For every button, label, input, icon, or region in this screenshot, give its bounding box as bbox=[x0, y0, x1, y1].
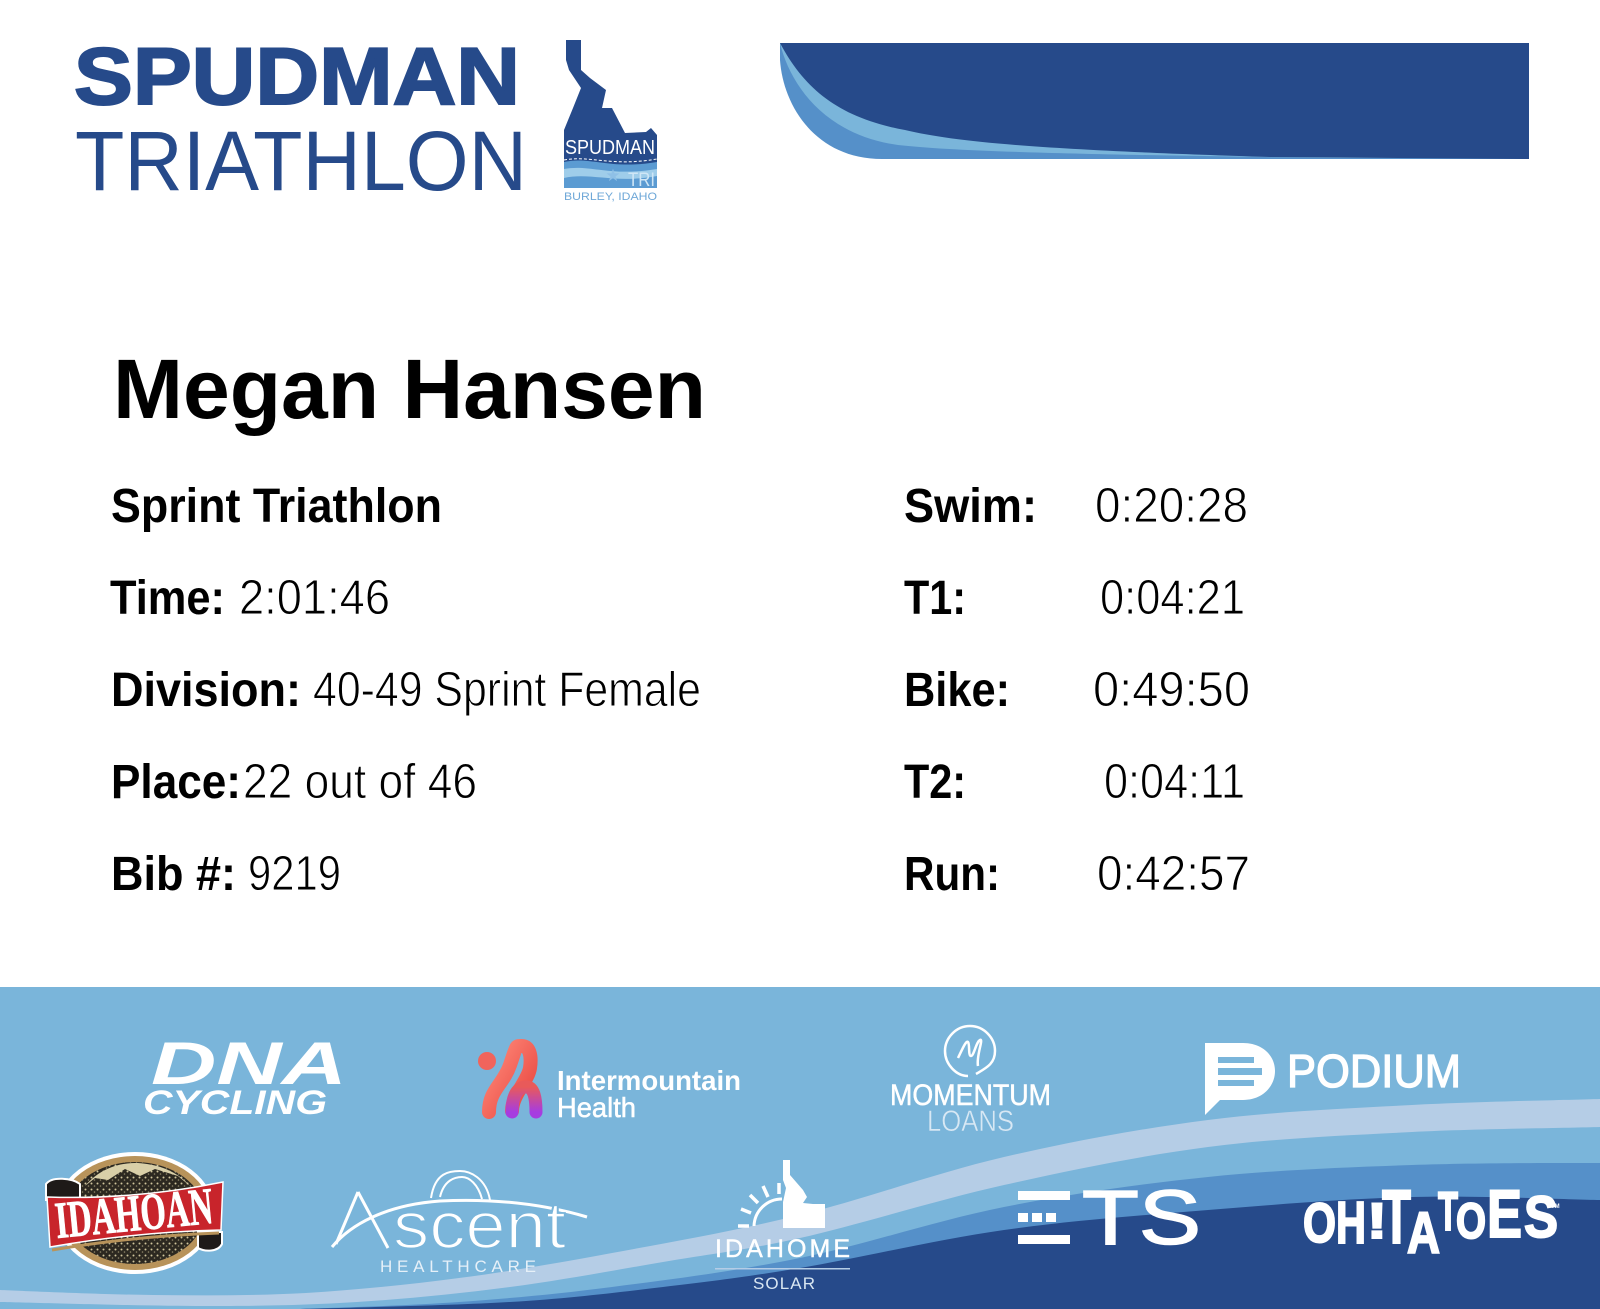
logo: Intermountain Health: Health bbox=[557, 1092, 636, 1123]
logo: Spudman Triathlon wordmark bbox=[74, 32, 527, 208]
logo: DNA Cycling: CYCLING bbox=[143, 1084, 327, 1122]
logo: Momentum Loans bbox=[890, 1026, 1051, 1138]
swim split bbox=[904, 479, 1248, 533]
T2 split: 0:04:11 bbox=[1104, 755, 1245, 809]
logo: Oh!tatoes: ! bbox=[1367, 1193, 1387, 1249]
run split bbox=[904, 847, 1250, 901]
logo: Oh!tatoes: E bbox=[1487, 1176, 1522, 1252]
bib number: Bib #: bbox=[111, 848, 236, 901]
logo: Momentum Loans: LOANS bbox=[927, 1105, 1014, 1138]
swim split: 0:20:28 bbox=[1095, 479, 1248, 533]
logo: ETS: TS bbox=[1082, 1175, 1201, 1261]
logo: Idahoan: IDAHOAN bbox=[53, 1178, 215, 1250]
logo: DNA Cycling: DNA bbox=[151, 1030, 347, 1097]
swim split: Swim: bbox=[904, 480, 1037, 533]
logo: Oh!tatoes: T bbox=[1438, 1180, 1458, 1242]
logo: ETS bbox=[1018, 1175, 1201, 1261]
bike split: Bike: bbox=[904, 664, 1010, 717]
bike split bbox=[904, 663, 1250, 717]
logo: Oh!tatoes: O bbox=[1303, 1191, 1336, 1254]
logo: Oh!tatoes: H bbox=[1336, 1190, 1366, 1256]
division: Division: bbox=[111, 664, 301, 717]
result details: left column bbox=[110, 480, 701, 901]
run split: 0:42:57 bbox=[1097, 847, 1250, 901]
T2 split: T2: bbox=[904, 756, 966, 809]
overall time bbox=[110, 571, 390, 625]
logo: Oh!tatoes: A bbox=[1407, 1201, 1440, 1266]
logo: Oh!tatoes: S bbox=[1524, 1185, 1558, 1250]
logo: Idaho state badge: SPUDMAN bbox=[565, 137, 655, 159]
logo: Oh!tatoes bbox=[1303, 1175, 1560, 1266]
logo: Podium bbox=[1205, 1043, 1461, 1115]
logo: Spudman Triathlon wordmark: SPUDMAN bbox=[74, 32, 520, 122]
logo: DNA Cycling bbox=[143, 1030, 347, 1122]
logo: Idaho state badge: ★ bbox=[605, 166, 621, 185]
logo: Momentum Loans: MOMENTUM bbox=[890, 1079, 1051, 1112]
heading: athlete name: Megan Hansen bbox=[113, 342, 706, 436]
logo: Idahoan bbox=[46, 1152, 223, 1274]
logo: Podium: PODIUM bbox=[1287, 1045, 1461, 1097]
place: 22 out of 46 bbox=[243, 755, 477, 809]
logo: Idahome Solar: SOLAR bbox=[753, 1274, 815, 1293]
place bbox=[111, 755, 477, 809]
logo: Intermountain Health: Intermountain bbox=[557, 1065, 741, 1096]
division bbox=[111, 663, 701, 717]
T2 split bbox=[904, 755, 1245, 809]
overall time: Time: bbox=[110, 572, 225, 625]
bike split: 0:49:50 bbox=[1093, 663, 1250, 717]
logo: Oh!tatoes: TM bbox=[1551, 1204, 1560, 1210]
sponsor band background with waves bbox=[0, 987, 1600, 1309]
logo: Idahome Solar: IDAHOME bbox=[715, 1235, 850, 1263]
logo: Idaho state badge: TRI bbox=[628, 170, 655, 191]
header banner with wave bbox=[780, 43, 1529, 159]
logo: Idaho state badge bbox=[564, 40, 657, 203]
logo: Ascent Healthcare: scent bbox=[393, 1188, 566, 1262]
logo: Oh!tatoes: O bbox=[1456, 1193, 1486, 1249]
overall time: 2:01:46 bbox=[239, 571, 390, 625]
result details: split times bbox=[904, 479, 1250, 901]
logo: Idaho state badge: BURLEY, IDAHO bbox=[564, 191, 657, 203]
bib number bbox=[111, 847, 341, 901]
logo: Ascent Healthcare: HEALTHCARE bbox=[380, 1257, 536, 1276]
T1 split: T1: bbox=[904, 572, 966, 625]
place: Place: bbox=[111, 756, 241, 809]
T1 split bbox=[904, 571, 1245, 625]
logo: Oh!tatoes: T bbox=[1382, 1175, 1411, 1260]
logo: Spudman Triathlon wordmark: TRIATHLON bbox=[75, 114, 527, 208]
logo: Idahome Solar bbox=[715, 1160, 850, 1293]
run split: Run: bbox=[904, 848, 1000, 901]
logo: Intermountain Health bbox=[478, 1046, 741, 1123]
logo: Ascent Healthcare bbox=[332, 1171, 587, 1276]
division: 40-49 Sprint Female bbox=[313, 663, 701, 717]
bib number: 9219 bbox=[248, 847, 341, 901]
race name: Sprint Triathlon bbox=[111, 480, 442, 533]
T1 split: 0:04:21 bbox=[1100, 571, 1245, 625]
